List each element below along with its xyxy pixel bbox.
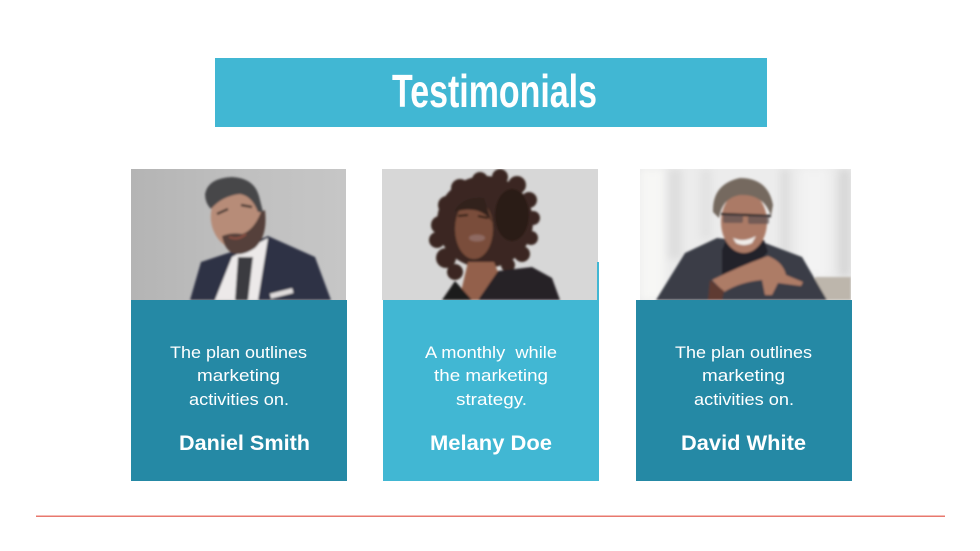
teal sliver: [597, 262, 599, 300]
title banner: [215, 58, 767, 127]
name: David White: [681, 432, 806, 455]
quote text: the marketing: [434, 366, 548, 385]
quote text: The plan outlines: [170, 343, 307, 362]
quote text: The plan outlines: [675, 343, 812, 362]
photo: Daniel Smith: [131, 169, 346, 300]
panel background: [131, 300, 347, 481]
title: Testimonials: [392, 65, 597, 117]
testimonials slide: [36, 58, 945, 517]
quote text: [675, 343, 812, 409]
quote text: A monthly while: [425, 343, 557, 362]
photo: David White: [640, 169, 851, 300]
name: Melany Doe: [430, 432, 552, 455]
quote text: strategy.: [456, 390, 527, 409]
quote text: marketing: [197, 366, 280, 385]
photo: Melany Doe: [382, 169, 598, 300]
quote text: [425, 343, 557, 409]
panel: Melany Doe: [382, 169, 599, 481]
panel background: [383, 300, 599, 481]
quote text: [170, 343, 307, 409]
panel: David White: [636, 169, 852, 481]
quote text: marketing: [702, 366, 785, 385]
name: Daniel Smith: [179, 432, 310, 455]
panel: Daniel Smith: [131, 169, 347, 481]
quote text: activities on.: [189, 390, 289, 409]
panel background: [636, 300, 852, 481]
quote text: activities on.: [694, 390, 794, 409]
